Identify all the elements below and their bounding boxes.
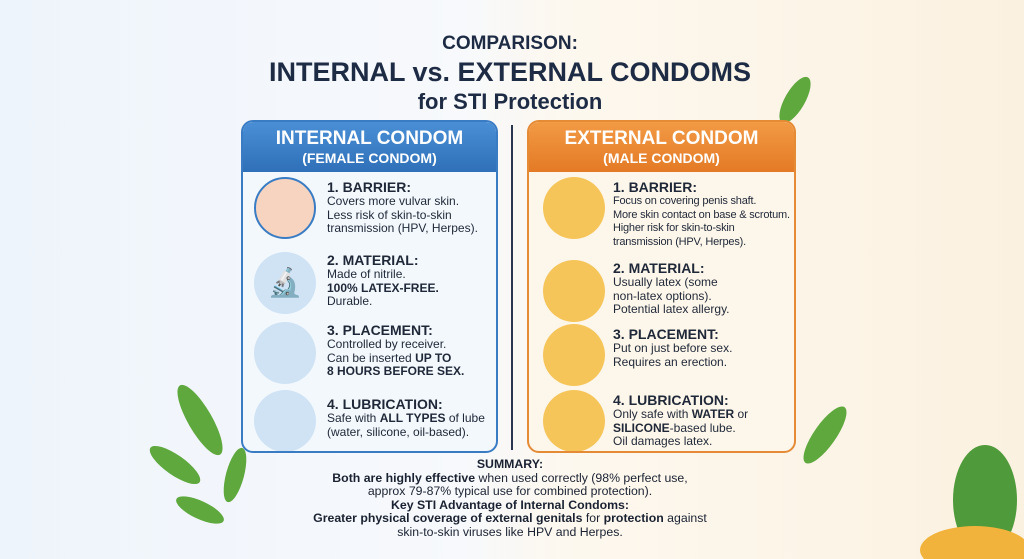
title: INTERNAL vs. EXTERNAL CONDOMS [269,57,751,87]
panel: internal condom [241,120,498,453]
summary: SUMMARY: [477,457,543,471]
panel: internal condom: Durable. [327,294,372,308]
panel: external condom: Put on just before sex. [613,341,732,355]
panel: external condom: More skin contact on base & scrotum. [613,209,790,221]
panel: internal condom: 8 HOURS BEFORE SEX. [327,364,464,378]
header: external [529,122,794,172]
panel: internal condom: Can be inserted UP TO [327,351,451,365]
panel: external condom: Focus on covering penis shaft. [613,195,756,207]
item: material [254,252,439,314]
summary: skin-to-skin viruses like HPV and Herpes. [397,524,623,538]
divider [511,125,513,450]
panel: external condom: 2. MATERIAL: [613,260,705,276]
item: barrier [254,177,478,239]
panel: external condom: SILICONE-based lube. [613,421,736,435]
header: external: EXTERNAL CONDOM [565,128,758,149]
panel: external condom: 4. LUBRICATION: [613,392,729,408]
panel: internal condom: Covers more vulvar skin. [327,194,459,208]
item: material [543,260,730,322]
item: lubrication [254,390,485,451]
panel: internal condom: 1. BARRIER: [327,179,411,195]
header: internal: (FEMALE CONDOM) [302,150,437,166]
decoration: leaves right [779,76,1024,559]
summary: Greater physical coverage of external genitals for protection against [313,511,707,525]
summary: approx 79-87% typical use for combined protection). [368,484,652,498]
panel: internal condom: 3. PLACEMENT: [327,322,433,338]
panel: external condom [527,120,796,453]
panel: internal condom: 4. LUBRICATION: [327,396,443,412]
panel: internal condom: Controlled by receiver. [327,337,446,351]
summary [313,457,707,538]
decoration: leaves left [150,384,246,524]
panel: external condom: Higher risk for skin-to-skin [613,222,735,234]
title: for STI Protection [418,89,602,114]
panel: internal condom: 100% LATEX-FREE. [327,281,439,295]
panel: external condom: Only safe with WATER or [613,407,748,421]
panel: internal condom: 2. MATERIAL: [327,252,419,268]
panel: internal condom: Made of nitrile. [327,267,406,281]
header: external: (MALE CONDOM) [603,150,720,166]
item: placement [543,324,732,386]
item: placement [254,322,464,384]
header: internal: INTERNAL CONDOM [276,128,463,149]
item: barrier [543,177,790,248]
summary: Both are highly effective when used correctly (98% perfect use, [332,470,688,484]
title: COMPARISON: [442,33,578,54]
panel: internal condom: (water, silicone, oil-based). [327,425,469,439]
panel: internal condom: Safe with ALL TYPES of lube [327,411,485,425]
panel: external condom: non-latex options). [613,289,712,303]
panel: external condom: 3. PLACEMENT: [613,326,719,342]
title [269,33,751,114]
panel: internal condom: transmission (HPV, Herpes). [327,221,478,235]
item: lubrication [543,390,748,451]
summary: Key STI Advantage of Internal Condoms: [391,498,629,512]
panel: external condom: Requires an erection. [613,355,727,369]
panel: external condom: transmission (HPV, Herpes). [613,236,746,248]
panel: external condom: Usually latex (some [613,275,718,289]
panel: internal condom: 🔬 [268,267,302,298]
header: internal [243,122,496,172]
panel: external condom: Oil damages latex. [613,434,712,448]
panel: internal condom: Less risk of skin-to-skin [327,208,452,222]
panel: external condom: 1. BARRIER: [613,179,697,195]
panel: external condom: Potential latex allergy. [613,302,730,316]
